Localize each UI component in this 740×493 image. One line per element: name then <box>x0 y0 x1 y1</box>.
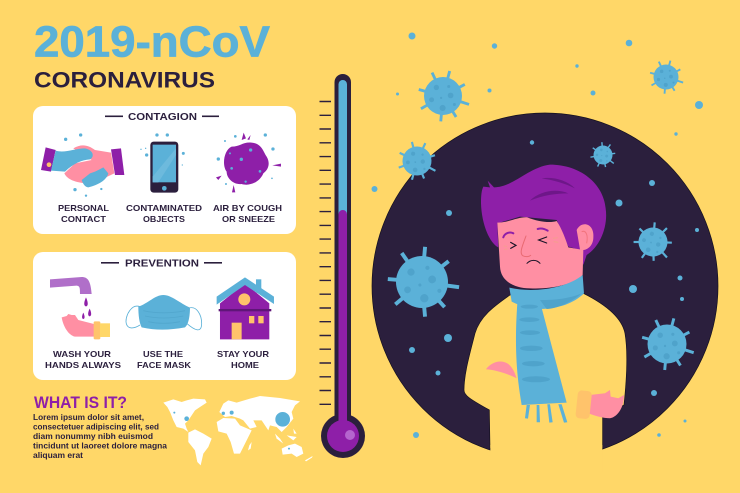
text block: description: Lorem ipsum dolor sit amet, <box>33 412 144 422</box>
scarf <box>509 275 584 423</box>
label: air by cough or sneeze: AIR BY COUGH <box>213 203 282 213</box>
face <box>497 217 583 288</box>
icon: handshake <box>41 133 124 197</box>
label: contaminated objects: CONTAMINATED <box>126 203 202 213</box>
label: wash your hands <box>45 349 121 370</box>
right hand <box>588 390 624 418</box>
label: air by cough or sneeze <box>213 203 282 224</box>
label: contaminated objects: OBJECTS <box>143 214 185 224</box>
left hand <box>486 361 517 378</box>
title: 2019-nCoV <box>34 18 271 66</box>
label: stay your home <box>217 349 269 370</box>
label: stay your home: STAY YOUR <box>217 349 269 359</box>
text block: description: diam nonummy nibh euismod <box>33 431 153 441</box>
thermometer ticks <box>320 102 331 404</box>
contagion heading: CONTAGION <box>128 111 197 123</box>
icon: cough cloud <box>216 133 281 192</box>
text block: description <box>33 412 167 460</box>
subtitle: CORONAVIRUS <box>34 68 215 92</box>
facial features <box>503 228 558 263</box>
text block: description: consectetuer adipiscing elit, sed <box>33 422 159 432</box>
icon: face mask <box>126 295 202 330</box>
thermometer <box>320 74 365 458</box>
label: contaminated objects <box>126 203 202 224</box>
icon: washing hands <box>50 277 110 339</box>
label: wash your hands: HANDS ALWAYS <box>45 360 121 370</box>
panel: contagion <box>33 106 296 234</box>
hair <box>481 165 606 265</box>
contagion heading <box>105 111 219 123</box>
heading: what is it: WHAT IS IT? <box>34 394 127 412</box>
ear <box>577 224 593 250</box>
label: personal contact <box>58 203 109 224</box>
label: use the face mask <box>137 349 192 370</box>
label: personal contact: PERSONAL <box>58 203 109 213</box>
label: stay your home: HOME <box>231 360 259 370</box>
panel: prevention <box>33 252 296 380</box>
dark circle backdrop <box>372 113 718 459</box>
world map <box>163 396 313 465</box>
text block: description: tincidunt ut laoreet dolore magna <box>33 440 167 450</box>
text block: description: aliquam erat <box>33 450 83 460</box>
sweater <box>464 293 627 449</box>
person <box>464 165 627 472</box>
label: air by cough or sneeze: OR SNEEZE <box>222 214 275 224</box>
prevention heading <box>101 258 222 270</box>
viruses <box>383 61 694 370</box>
icon: smartphone <box>140 133 185 193</box>
label: use the face mask: FACE MASK <box>137 360 192 370</box>
label: use the face mask: USE THE <box>143 349 183 359</box>
prevention heading: PREVENTION <box>125 258 199 270</box>
icon: house <box>217 277 274 339</box>
label: personal contact: CONTACT <box>61 214 107 224</box>
label: wash your hands: WASH YOUR <box>53 349 111 359</box>
dots <box>372 32 703 438</box>
